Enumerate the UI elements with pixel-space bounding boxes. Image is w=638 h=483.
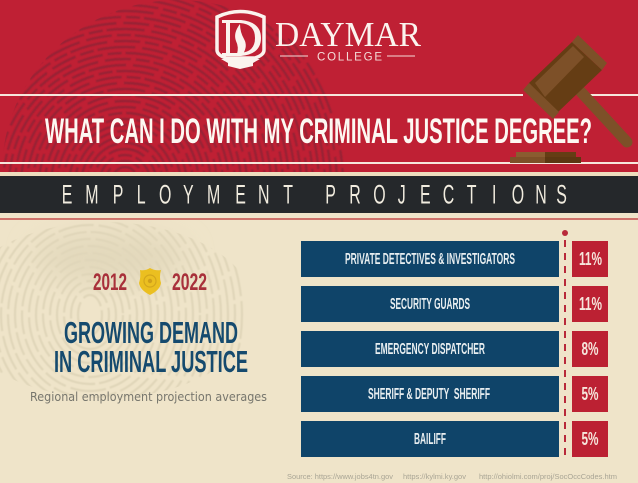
row: emergency dispatcher: 8% — [582, 339, 598, 359]
gavel head light face — [535, 46, 584, 97]
row: bailiff: BAILIFF — [414, 431, 446, 448]
icon: police badge — [139, 268, 161, 295]
row: sheriff: SHERIFF & DEPUTY SHERIFF — [368, 386, 490, 403]
year start: 2012 — [93, 269, 127, 296]
panel: employment projections band — [0, 172, 638, 213]
timeline dashed line — [562, 230, 568, 458]
sub wordmark: COLLEGE — [317, 52, 382, 64]
source note — [287, 474, 617, 481]
source note: http://ohiolmi.com/proj/SocOccCodes.htm — [479, 474, 617, 481]
row: security guards: SECURITY GUARDS — [390, 296, 470, 313]
panel: red header — [0, 0, 638, 172]
gavel left cap — [523, 83, 559, 119]
heading line 2: IN CRIMINAL JUSTICE — [54, 345, 248, 379]
row: security guards: 11% — [579, 294, 602, 314]
header rule top — [0, 94, 523, 96]
red rule under band — [0, 218, 638, 220]
icon: gavel — [510, 35, 627, 163]
row: private detectives — [301, 241, 608, 277]
band heading: EMPLOYMENTPROJECTIONS — [62, 179, 567, 210]
header rule bottom — [0, 162, 638, 164]
gavel head body — [529, 42, 602, 113]
gavel base — [516, 152, 545, 157]
row: security guards — [301, 286, 608, 322]
fingerprint texture on red — [2, 0, 344, 172]
row: sheriff: 5% — [582, 384, 598, 404]
fingerprint texture on cream — [0, 220, 243, 398]
gavel handle — [581, 92, 627, 142]
source note: Source: https://www.jobs4tn.gov — [287, 474, 394, 481]
row: private detectives: 11% — [579, 249, 602, 269]
row: emergency dispatcher: EMERGENCY DISPATCHER — [375, 341, 485, 358]
row: emergency dispatcher — [301, 331, 608, 367]
row: bailiff: 5% — [582, 429, 598, 449]
row: bailiff — [301, 421, 608, 457]
subheading: Regional employment projection averages — [30, 390, 267, 404]
wordmark: DAYMAR — [275, 15, 422, 54]
gavel right cap — [572, 35, 607, 70]
heading line 1: GROWING DEMAND — [64, 316, 238, 350]
row: sheriff — [301, 376, 608, 412]
year end: 2022 — [172, 269, 207, 296]
logo: Daymar College — [217, 12, 422, 69]
panel: left summary — [30, 268, 267, 404]
source note: https://kylmi.ky.gov — [403, 474, 467, 481]
icon: shield — [217, 12, 264, 69]
